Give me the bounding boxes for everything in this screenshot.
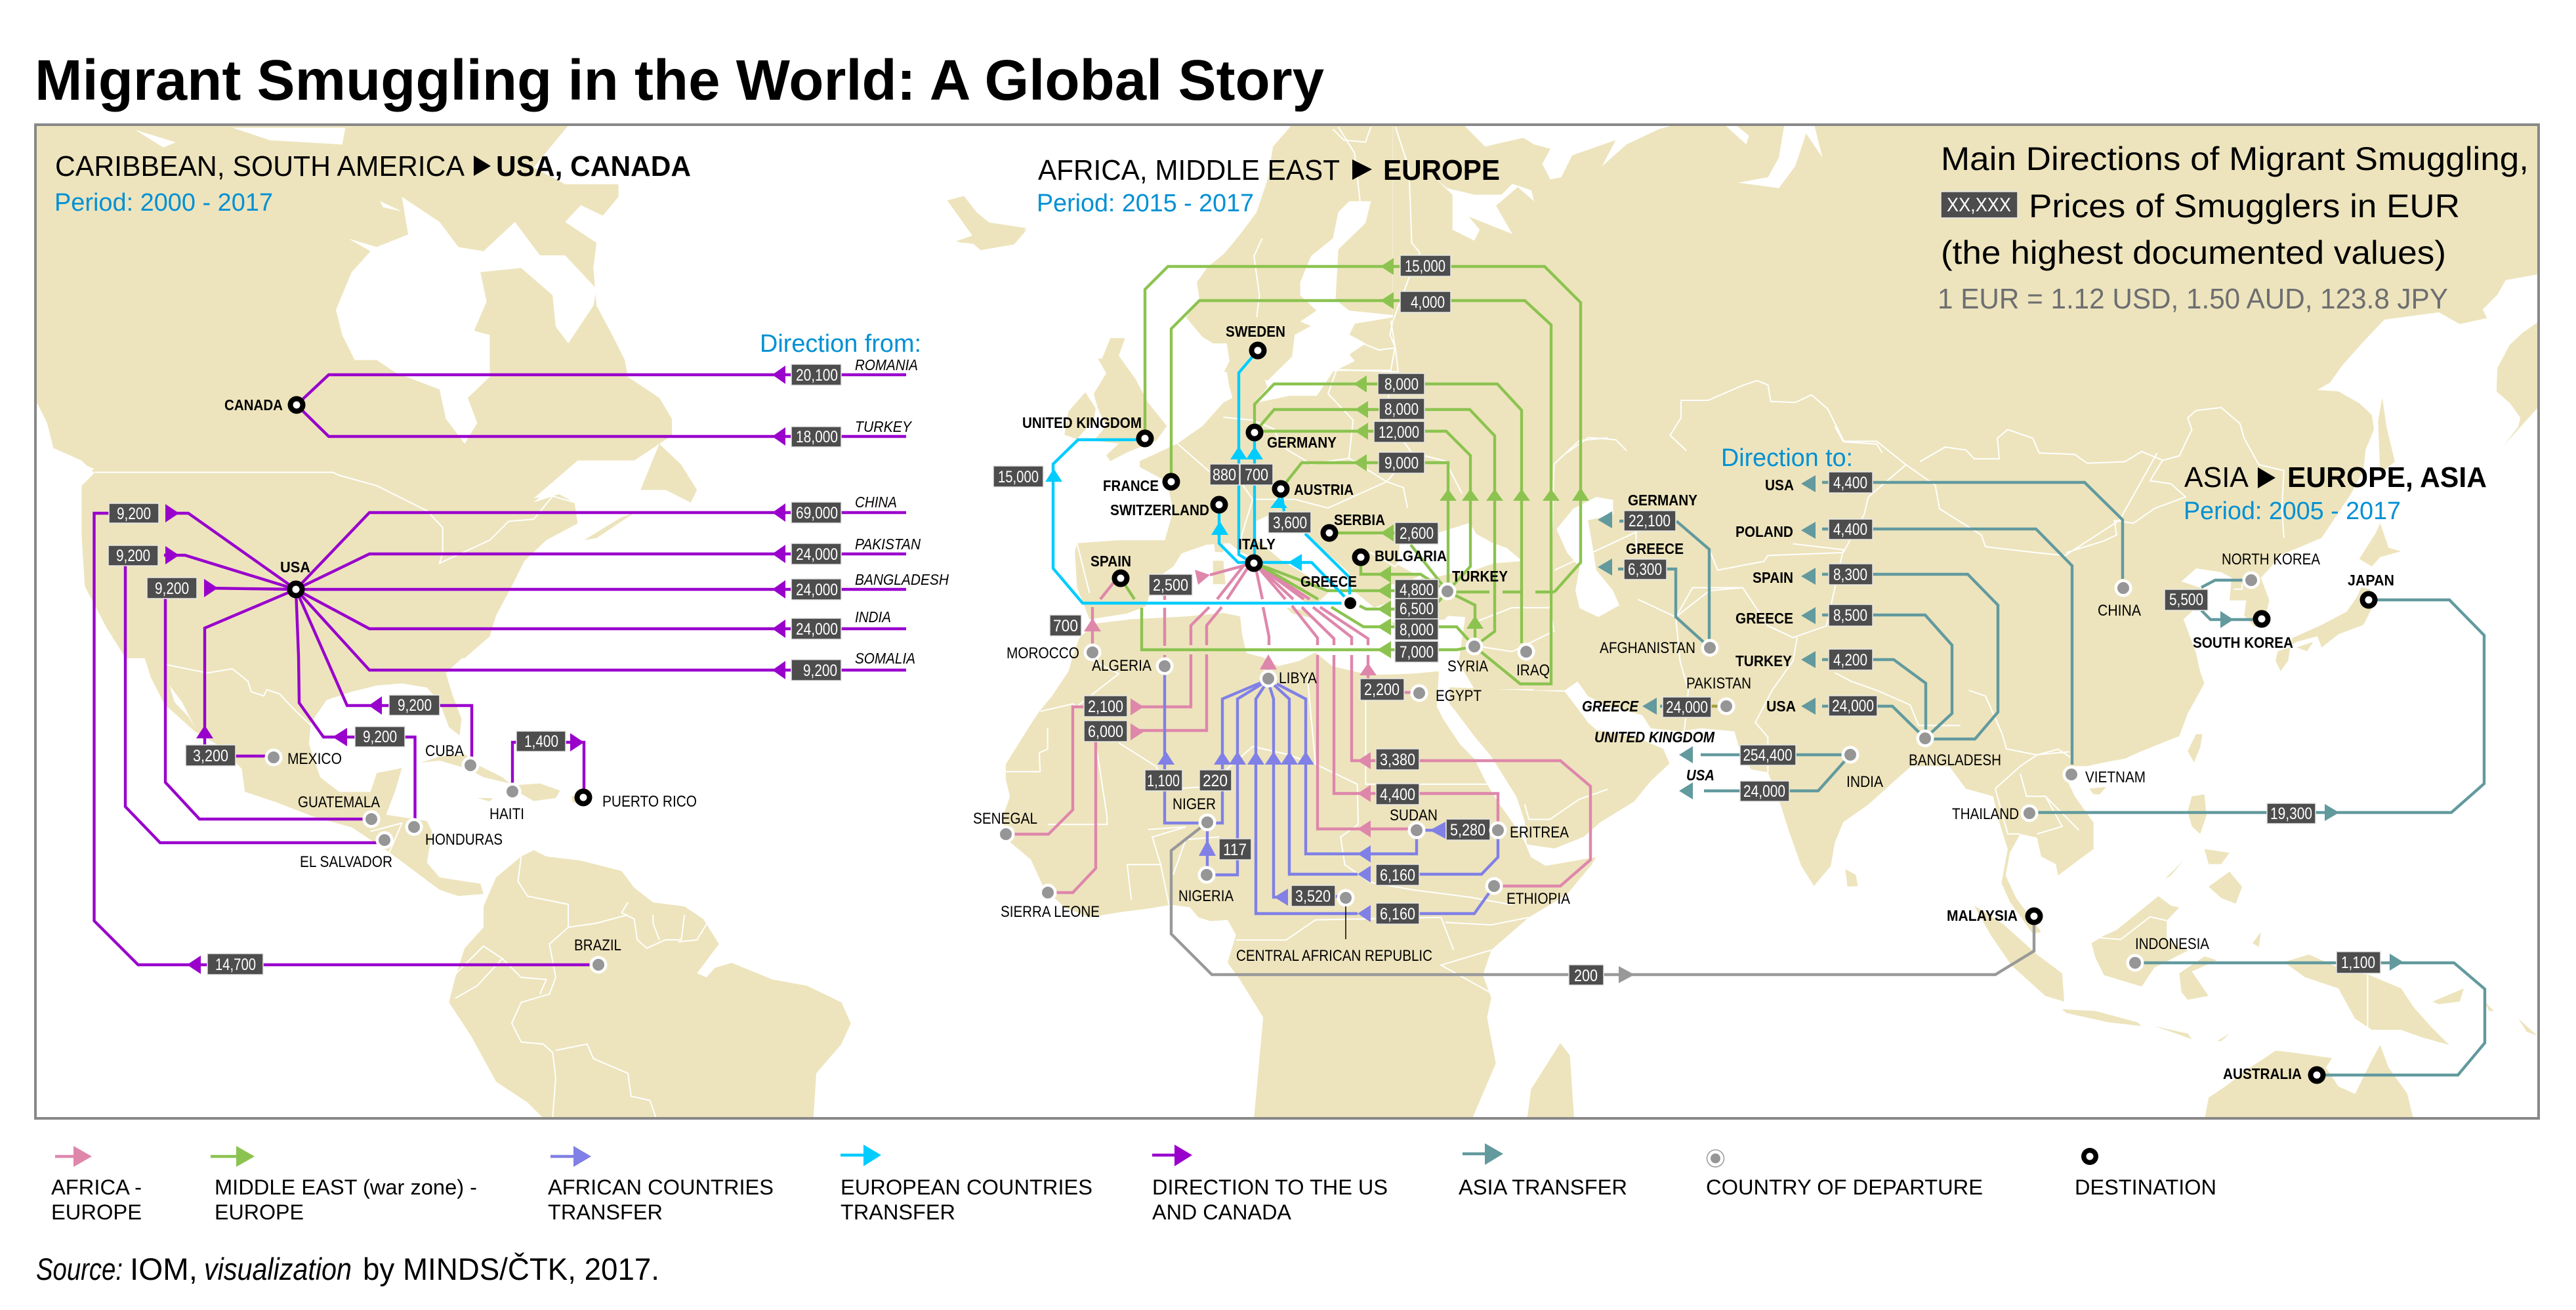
heading: Americas: Period: 2000 - 2017 — [54, 189, 273, 217]
country labels: Americas: TURKEY — [855, 418, 913, 435]
routes: Asia transfer (teal): 8,500 — [1833, 606, 1867, 625]
country labels: Europe: FRANCE — [1103, 477, 1159, 494]
routes: European countries transfer (cyan) — [993, 350, 1350, 603]
routes: Middle East to Europe (green): 8,000 — [1400, 621, 1434, 639]
routes: African countries transfer (blue): 220 — [1203, 772, 1228, 790]
routes: direction to the US and Canada (purple): 9,200 — [116, 547, 150, 565]
routes: Asia transfer (teal): 8,300 — [1833, 566, 1867, 584]
routes: Middle East to Europe (green): 2,600 — [1400, 524, 1434, 543]
source note: IOM, — [130, 1252, 197, 1286]
routes: Asia transfer (teal): 24,000 — [1743, 782, 1785, 801]
country labels: Asia — [1582, 476, 2394, 1082]
heading: Americas: Direction from: — [760, 330, 921, 358]
country labels: Europe: UNITED KINGDOM — [1022, 414, 1142, 431]
routes: Asia transfer (teal): 1,100 — [2341, 954, 2375, 972]
country labels: Europe: SWITZERLAND — [1110, 501, 1209, 518]
country labels: Africa: CENTRAL AFRICAN REPUBLIC — [1236, 947, 1432, 965]
heading: Asia — [1721, 444, 2487, 525]
routes: direction to the US and Canada (purple): 20,100 — [796, 366, 838, 385]
routes: Africa to Europe (pink): 6,000 — [1088, 723, 1123, 741]
country labels: Africa: NIGERIA — [1178, 887, 1234, 905]
routes: Asia transfer (teal): 19,300 — [2270, 805, 2312, 823]
heading: Europe: AFRICA, MIDDLE EAST — [1038, 154, 1340, 186]
legend item: European countries transfer: TRANSFER — [841, 1200, 955, 1224]
routes: African countries transfer (blue) — [1145, 666, 1498, 924]
routes: Middle East to Europe (green): 4,800 — [1400, 581, 1434, 599]
routes: African countries transfer (blue): 5,280 — [1450, 821, 1485, 839]
country labels: Asia: MALAYSIA — [1947, 907, 2018, 924]
country labels: Asia: USA — [1686, 767, 1714, 784]
routes: Africa to Europe (pink): 700 — [1053, 617, 1078, 635]
heading: Americas — [54, 150, 921, 358]
country labels: Africa: MOROCCO — [1007, 644, 1079, 662]
source note — [36, 1252, 659, 1286]
routes: Asia transfer (teal): 4,400 — [1833, 474, 1867, 492]
markers: destinations — [287, 341, 2378, 1084]
country labels: Asia: SPAIN — [1753, 569, 1793, 586]
title: Migrant Smuggling in the World: A Global Story — [35, 49, 1324, 112]
legend item: Asia transfer: ASIA TRANSFER — [1459, 1175, 1627, 1199]
country labels: Europe: BULGARIA — [1375, 547, 1447, 564]
routes: Middle East to Europe (green): 6,500 — [1400, 600, 1434, 618]
country labels: Americas: HONDURAS — [425, 831, 503, 849]
country labels: Asia: GREECE — [1582, 698, 1639, 715]
country labels: Americas: CANADA — [224, 396, 283, 413]
country labels: Asia: THAILAND — [1952, 805, 2019, 823]
legend item: direction to the US and Canada — [1152, 1145, 1388, 1224]
routes: Africa to Europe (pink): 4,400 — [1380, 786, 1415, 804]
country labels: Europe: TURKEY — [1452, 568, 1508, 585]
country labels: Africa: SUDAN — [1390, 807, 1438, 824]
legend item: destination: DESTINATION — [2075, 1175, 2216, 1199]
country labels: Asia: SOUTH KOREA — [2193, 634, 2293, 651]
country labels: Asia: AUSTRALIA — [2223, 1065, 2302, 1082]
country labels: Europe: SWEDEN — [1226, 323, 1285, 340]
country labels: Europe — [1022, 323, 1550, 679]
routes: Asia transfer (teal): 24,000 — [1666, 698, 1708, 717]
heading: Americas: USA, CANADA — [496, 150, 691, 182]
routes: direction to the US and Canada (purple): 9,200 — [117, 505, 151, 523]
country labels: Asia: GREECE — [1626, 540, 1684, 557]
routes: Asia transfer (teal): 6,300 — [1628, 560, 1662, 579]
routes: Middle East to Europe (green): 15,000 — [1405, 257, 1445, 276]
panel: world map — [31, 110, 2539, 1121]
country labels: Africa: SIERRA LEONE — [1001, 903, 1100, 921]
country labels: Asia: VIETNAM — [2085, 769, 2146, 786]
routes: European countries transfer (cyan): 700 — [1245, 466, 1268, 484]
country labels: Americas: BANGLADESH — [855, 571, 949, 588]
routes: Africa to Europe (pink) — [1006, 562, 1590, 893]
source note: Source: — [36, 1252, 123, 1286]
legend title block: Main Directions of Migrant Smuggling, — [1941, 140, 2529, 177]
routes: direction to the US and Canada (purple): 3,200 — [193, 747, 228, 765]
routes: Africa to Europe (pink): 2,100 — [1088, 698, 1123, 716]
legend item: European countries transfer: EUROPEAN COUNTRIES — [841, 1175, 1092, 1199]
country labels: Asia: PAKISTAN — [1686, 675, 1751, 692]
routes: Middle East to Europe (green): 8,000 — [1384, 375, 1419, 394]
country labels: Americas: INDIA — [855, 608, 891, 625]
legend item: country of departure — [1706, 1150, 1983, 1199]
legend item: direction to the US and Canada: AND CANADA — [1152, 1200, 1292, 1224]
legend item: country of departure: COUNTRY OF DEPARTURE — [1706, 1175, 1983, 1199]
routes: Middle East to Europe (green): 7,000 — [1400, 643, 1434, 662]
legend title block: 1 EUR = 1.12 USD, 1.50 AUD, 123.8 JPY — [1938, 283, 2448, 315]
country labels: Asia: JAPAN — [2348, 572, 2394, 589]
legend item: African countries transfer: AFRICAN COUNTRIES — [548, 1175, 774, 1199]
legend item: destination — [2075, 1148, 2216, 1199]
routes: direction to the US and Canada (purple): 69,000 — [796, 504, 838, 522]
legend item: Asia transfer — [1459, 1143, 1627, 1199]
routes: Asia transfer (teal): 22,100 — [1629, 512, 1671, 530]
country labels: Americas: CUBA — [425, 742, 464, 760]
country labels: Americas: PUERTO RICO — [602, 793, 697, 811]
country labels: Africa: NIGER — [1173, 795, 1216, 813]
routes: Middle East to Europe (green): 9,000 — [1384, 454, 1419, 473]
routes: direction to the US and Canada (purple): 14,700 — [215, 956, 256, 974]
heading: Europe — [1037, 154, 1500, 217]
country labels: Americas: BRAZIL — [574, 937, 621, 954]
country labels: Europe: SPAIN — [1091, 553, 1131, 570]
country labels: Asia: GREECE — [1735, 610, 1793, 627]
country labels: Americas: GUATEMALA — [298, 793, 380, 811]
country labels: Americas: HAITI — [489, 805, 524, 823]
markers: countries of departure — [265, 571, 2260, 974]
route: Niger to Malaysia (gray) — [1171, 822, 2034, 985]
legend item: European countries transfer — [841, 1145, 1092, 1224]
routes: Asia transfer (teal): 254,400 — [1743, 746, 1793, 765]
route: Niger to Malaysia (gray): 200 — [1574, 967, 1598, 985]
heading: Europe: Period: 2015 - 2017 — [1037, 190, 1254, 217]
routes: African countries transfer (blue): 6,160 — [1380, 905, 1415, 923]
country labels: Asia: POLAND — [1735, 523, 1793, 540]
country labels: Asia: AFGHANISTAN — [1600, 639, 1695, 657]
routes: African countries transfer (blue): 3,520 — [1295, 887, 1331, 906]
legend title block: (the highest documented values) — [1941, 234, 2446, 271]
heading: Asia: Direction to: — [1721, 444, 1853, 472]
heading: Asia: ASIA — [2184, 461, 2249, 494]
routes: direction to the US and Canada (purple): 24,000 — [796, 620, 838, 639]
country labels: Asia: BANGLADESH — [1909, 751, 2001, 769]
legend item: Middle East - Europe: EUROPE — [215, 1200, 304, 1224]
country labels: Asia: UNITED KINGDOM — [1594, 729, 1715, 746]
country labels: Americas: USA — [280, 559, 310, 576]
country labels: Europe: SYRIA — [1447, 658, 1488, 675]
legend item: African countries transfer: TRANSFER — [548, 1200, 663, 1224]
country labels: Americas: ROMANIA — [855, 356, 918, 373]
routes: Asia transfer (teal): 5,500 — [2169, 591, 2203, 609]
legend — [51, 1143, 2216, 1224]
routes: Middle East to Europe (green): 4,000 — [1411, 293, 1445, 312]
country labels: Europe: ITALY — [1238, 536, 1276, 553]
routes: Africa to Europe (pink): 2,200 — [1364, 681, 1400, 699]
country labels: Africa: EGYPT — [1436, 687, 1482, 705]
legend title block: Prices of Smugglers in EUR — [2029, 188, 2460, 224]
legend item: Middle East - Europe: MIDDLE EAST (war zone) - — [215, 1175, 477, 1199]
routes: Asia transfer (teal) — [1598, 472, 2485, 1075]
country labels: Asia: GERMANY — [1628, 492, 1697, 509]
country labels: Americas: PAKISTAN — [855, 536, 921, 553]
country labels: Asia: TURKEY — [1735, 652, 1792, 669]
routes: direction to the US and Canada (purple): 1,400 — [524, 732, 558, 751]
country labels: Africa — [973, 644, 1570, 965]
routes: European countries transfer (cyan): 3,600 — [1273, 514, 1307, 532]
source note: by MINDS/ČTK, 2017. — [363, 1252, 659, 1286]
legend item: Middle East - Europe — [211, 1146, 477, 1224]
routes: Middle East to Europe (green): 8,000 — [1384, 400, 1419, 419]
country labels: Africa: ERITREA — [1510, 824, 1569, 841]
legend item: direction to the US and Canada: DIRECTION TO THE US — [1152, 1175, 1388, 1199]
country labels: Europe: SERBIA — [1334, 511, 1385, 528]
heading: Europe: EUROPE — [1383, 154, 1500, 186]
heading: Americas: CARIBBEAN, SOUTH AMERICA — [55, 150, 465, 182]
routes: direction to the US and Canada (purple): 9,200 — [398, 696, 432, 715]
routes: direction to the US and Canada (purple): 24,000 — [796, 581, 838, 599]
routes: African countries transfer (blue): 117 — [1223, 841, 1247, 859]
routes: direction to the US and Canada (purple): 9,200 — [803, 662, 837, 680]
country labels: Asia: USA — [1766, 698, 1796, 715]
routes: Africa to Europe (pink): 3,380 — [1380, 751, 1415, 769]
routes: Africa to Europe (pink): 2,500 — [1153, 576, 1188, 595]
routes: African countries transfer (blue): 6,160 — [1380, 866, 1415, 885]
routes: Asia transfer (teal): 24,000 — [1832, 697, 1874, 715]
source note: visualization — [204, 1252, 352, 1286]
routes: Asia transfer (teal): 4,200 — [1833, 651, 1867, 669]
country labels: Americas — [224, 356, 949, 954]
heading: Asia: EUROPE, ASIA — [2287, 461, 2487, 494]
country labels: Europe: AUSTRIA — [1294, 481, 1354, 498]
routes: direction to the US and Canada (purple): 9,200 — [363, 728, 397, 746]
country labels: Asia: CHINA — [2098, 602, 2141, 620]
routes: direction to the US and Canada (purple): 18,000 — [796, 428, 838, 446]
legend title block: XX,XXX — [1947, 194, 2011, 216]
routes: African countries transfer (blue): 1,100 — [1147, 772, 1180, 790]
country labels: Europe: GERMANY — [1267, 434, 1337, 451]
country labels: Americas: MEXICO — [287, 750, 342, 768]
legend item: Africa - Europe: AFRICA - — [51, 1175, 142, 1199]
legend title block — [1938, 140, 2529, 315]
routes: European countries transfer (cyan): 880 — [1213, 466, 1236, 484]
country labels: Asia: INDONESIA — [2135, 935, 2209, 953]
country labels: Africa: SENEGAL — [973, 810, 1037, 828]
country labels: Asia: USA — [1765, 476, 1794, 494]
routes: direction to the US and Canada (purple): 9,200 — [155, 580, 189, 598]
country labels: Africa: LIBYA — [1279, 669, 1317, 687]
country labels: Europe: IRAQ — [1516, 662, 1550, 679]
country labels: Africa: ETHIOPIA — [1506, 890, 1570, 908]
routes: Middle East to Europe (green) — [1121, 255, 1589, 684]
heading: Asia: Period: 2005 - 2017 — [2184, 497, 2401, 525]
country labels: Africa: ALGERIA — [1092, 657, 1152, 675]
country labels: Americas: SOMALIA — [855, 650, 915, 667]
panel frame — [35, 125, 2539, 1118]
routes: Middle East to Europe (green): 12,000 — [1379, 423, 1419, 442]
legend item: Africa - Europe: EUROPE — [51, 1200, 142, 1224]
routes: European countries transfer (cyan): 15,000 — [998, 468, 1039, 486]
country labels: Americas: EL SALVADOR — [300, 853, 392, 871]
country labels: Europe: GREECE — [1300, 573, 1357, 590]
routes: direction to the US and Canada (purple) — [94, 364, 906, 975]
legend item: African countries transfer — [548, 1146, 774, 1224]
country labels: Asia: INDIA — [1846, 773, 1883, 791]
legend item: Africa - Europe — [51, 1146, 142, 1224]
country labels: Americas: CHINA — [855, 494, 897, 511]
routes: Asia transfer (teal): 4,400 — [1833, 520, 1867, 539]
routes: direction to the US and Canada (purple): 24,000 — [796, 545, 838, 564]
country labels: Asia: NORTH KOREA — [2222, 551, 2320, 568]
